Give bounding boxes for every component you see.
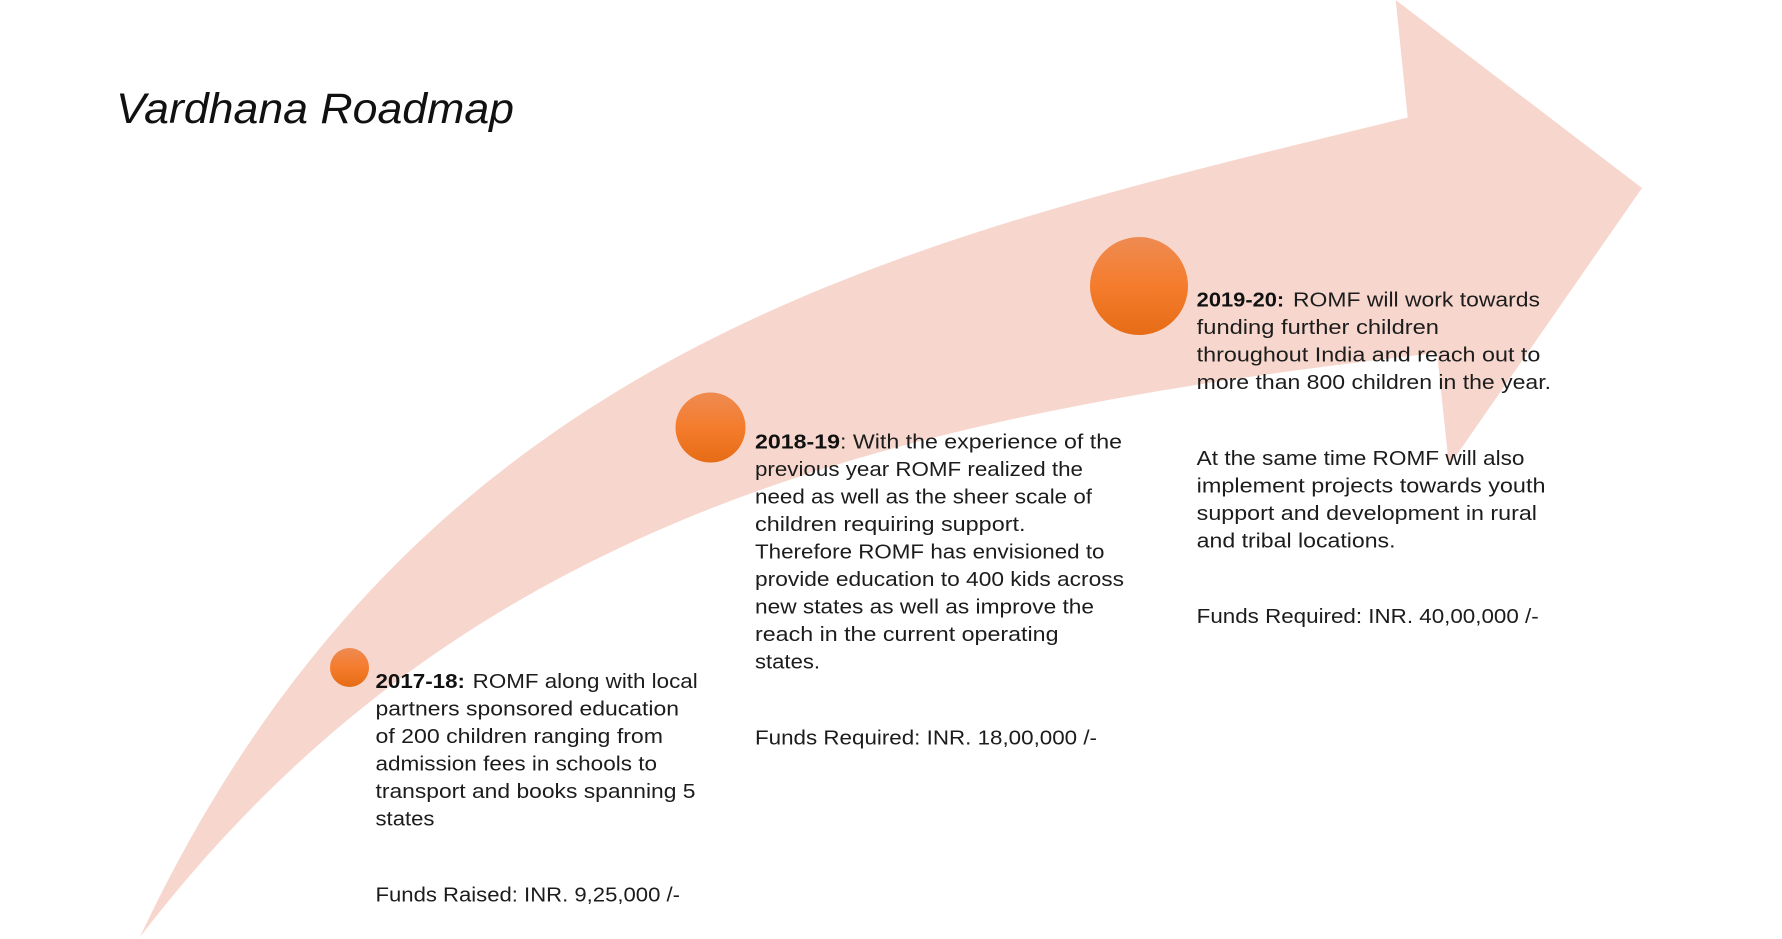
text block: 2018-19: states. bbox=[755, 650, 820, 673]
text block: 2017-18: partners sponsored education bbox=[376, 698, 679, 720]
text block: 2019-20: ROMF will work towards bbox=[1293, 289, 1540, 312]
text block: 2018-19: need as well as the sheer scale of bbox=[755, 485, 1092, 508]
text block: 2017-18: Funds Raised: INR. 9,25,000 /- bbox=[376, 884, 680, 907]
text block: 2017-18: states bbox=[376, 808, 434, 830]
text block: 2018-19: new states as well as improve the bbox=[755, 595, 1094, 618]
text block: 2019-20 bbox=[1197, 289, 1551, 628]
text block: 2017-18: 2017-18: bbox=[376, 670, 465, 693]
text block: 2019-20: throughout India and reach out to bbox=[1197, 344, 1540, 367]
text block: 2017-18: transport and books spanning 5 bbox=[376, 780, 696, 803]
text block: 2019-20: funding further children bbox=[1197, 316, 1439, 339]
text block: 2019-20: implement projects towards youth bbox=[1197, 474, 1546, 498]
text block: 2019-20: 2019-20: bbox=[1197, 289, 1284, 312]
text block: 2018-19: provide education to 400 kids across bbox=[755, 568, 1124, 591]
text block: 2019-20: and tribal locations. bbox=[1197, 530, 1396, 552]
text block: 2018-19: previous year ROMF realized the bbox=[755, 458, 1083, 481]
text block: 2018-19: Funds Required: INR. 18,00,000 /- bbox=[755, 726, 1097, 750]
milestone dot 2019-20 bbox=[1090, 237, 1188, 335]
milestone dot 2017-18 bbox=[330, 648, 369, 687]
text block: 2017-18: ROMF along with local bbox=[473, 670, 698, 693]
text block: 2018-19: reach in the current operating bbox=[755, 623, 1058, 646]
text block: 2017-18: admission fees in schools to bbox=[376, 752, 657, 776]
text block: 2018-19: 2018-19 bbox=[755, 430, 840, 453]
text block: 2019-20: support and development in rural bbox=[1197, 502, 1537, 525]
text block: 2018-19: Therefore ROMF has envisioned to bbox=[755, 540, 1104, 563]
text block: 2019-20: more than 800 children in the year. bbox=[1197, 371, 1551, 394]
text block: 2017-18: of 200 children ranging from bbox=[376, 725, 663, 748]
text block: 2018-19: : With the experience of the bbox=[840, 430, 1122, 453]
text block: 2018-19: children requiring support. bbox=[755, 513, 1026, 536]
text block: 2018-19 bbox=[755, 430, 1124, 750]
text block: 2019-20: Funds Required: INR. 40,00,000 /- bbox=[1197, 605, 1539, 628]
text block: 2017-18 bbox=[376, 670, 698, 907]
milestone dot 2018-19 bbox=[676, 392, 746, 462]
text block: 2019-20: At the same time ROMF will also bbox=[1197, 447, 1524, 470]
title: Vardhana Roadmap bbox=[116, 85, 514, 133]
